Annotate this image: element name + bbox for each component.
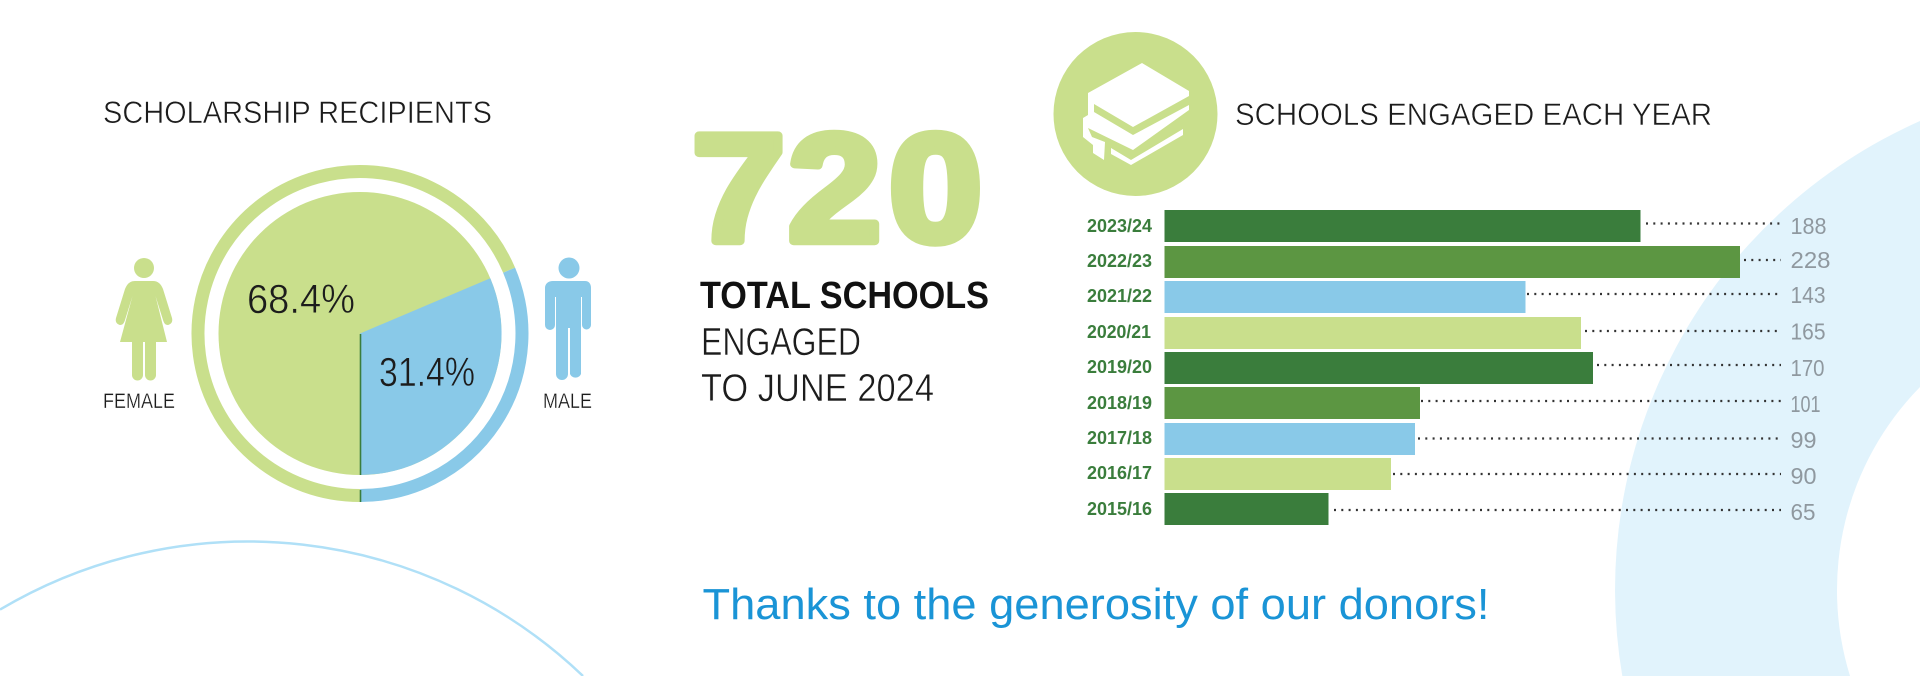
- bar 2016/17: 2016/17: [1087, 463, 1152, 483]
- heading: schools engaged each year: SCHOOLS ENGAGED EACH YEAR: [1235, 96, 1712, 132]
- pie chart: [198, 171, 522, 502]
- bar 2022/23: 228: [1790, 247, 1830, 273]
- pie chart: 31.4%: [379, 349, 475, 395]
- heading: scholarship recipients: SCHOLARSHIP RECIPIENTS: [103, 94, 492, 130]
- bar 2018/19: 101: [1790, 391, 1820, 417]
- bar 2023/24: 188: [1790, 213, 1826, 239]
- panel: schools engaged each year: [1054, 32, 1830, 525]
- bar 2020/21: [1087, 317, 1826, 349]
- big number: 720: [692, 104, 982, 274]
- icon: books: [1054, 32, 1218, 196]
- engaged text: ENGAGED: [701, 321, 861, 364]
- bar 2023/24: 2023/24: [1087, 216, 1152, 236]
- bar 2019/20: [1087, 352, 1824, 384]
- bar 2015/16: 65: [1790, 499, 1816, 525]
- label: male: MALE: [543, 390, 592, 413]
- bar 2017/18: [1087, 423, 1816, 455]
- bar chart: [1087, 210, 1830, 525]
- total schools text: TOTAL SCHOOLS: [700, 275, 989, 317]
- to june 2024 text: TO JUNE 2024: [701, 367, 934, 410]
- icon: female figure: [116, 258, 172, 381]
- bar 2017/18: 99: [1790, 427, 1816, 453]
- bar 2022/23: [1087, 246, 1830, 278]
- icon: male figure: [545, 258, 591, 380]
- bar 2021/22: 2021/22: [1087, 286, 1152, 306]
- thanks message: Thanks to the generosity of our donors!: [702, 580, 1490, 629]
- bar 2015/16: [1087, 493, 1816, 525]
- bar 2016/17: 90: [1790, 463, 1816, 489]
- label: female: FEMALE: [103, 390, 175, 413]
- bar 2023/24: [1087, 210, 1826, 242]
- panel: total schools: [692, 104, 989, 410]
- bar 2021/22: [1087, 281, 1826, 313]
- background arc: [0, 542, 583, 676]
- bar 2020/21: 165: [1790, 318, 1826, 344]
- background ring: [1615, 121, 1920, 676]
- bar 2019/20: 2019/20: [1087, 357, 1152, 377]
- bar 2018/19: [1087, 387, 1820, 419]
- bar 2017/18: 2017/18: [1087, 428, 1152, 448]
- panel: scholarship recipients: [103, 94, 592, 502]
- bar 2016/17: [1087, 458, 1816, 490]
- bar 2018/19: 2018/19: [1087, 393, 1152, 413]
- bar 2015/16: 2015/16: [1087, 499, 1152, 519]
- pie chart: 68.4%: [247, 276, 355, 322]
- bar 2019/20: 170: [1790, 355, 1824, 381]
- bar 2020/21: 2020/21: [1087, 322, 1151, 342]
- bar 2021/22: 143: [1790, 282, 1826, 308]
- bar 2022/23: 2022/23: [1087, 251, 1152, 271]
